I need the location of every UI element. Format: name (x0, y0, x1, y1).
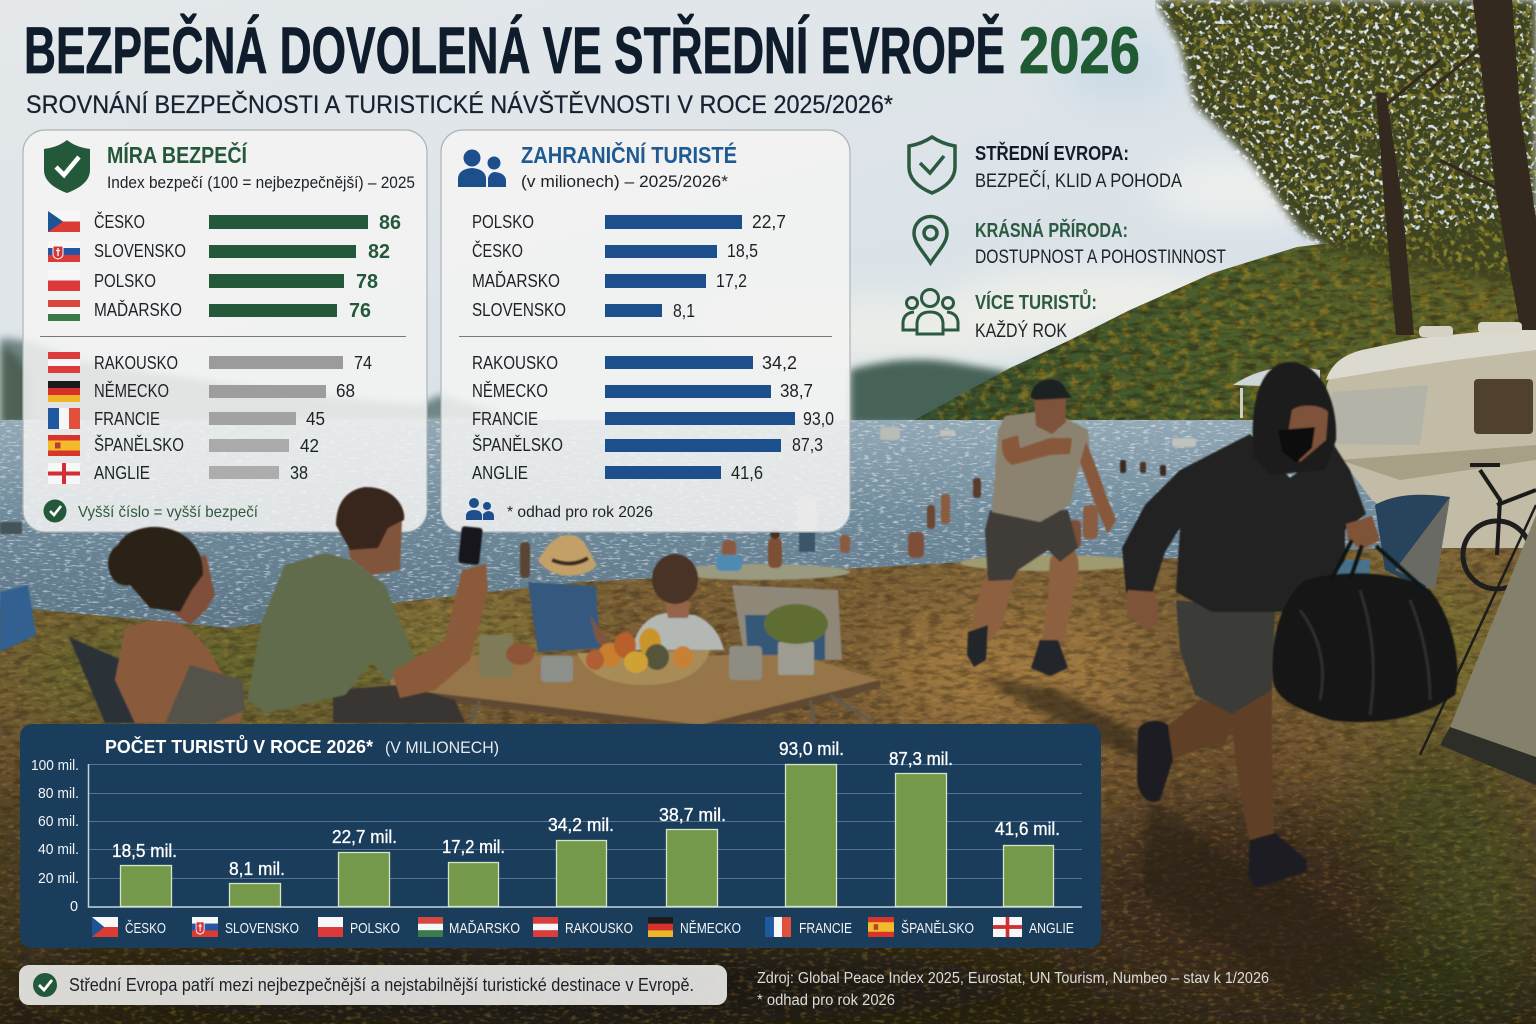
key message: safety: BEZPEČÍ, KLID A POHODA (975, 169, 1182, 192)
man with phone (247, 487, 488, 723)
row: Německo: NĚMECKO (472, 381, 548, 401)
row: Polsko (48, 270, 378, 293)
row: Slovensko: 8,1 (673, 301, 695, 321)
source note: * odhad pro rok 2026 (757, 992, 895, 1009)
bar value labels (112, 738, 1060, 879)
panel heading: ZAHRANIČNÍ TURISTÉ (521, 141, 737, 168)
panel heading: MÍRA BEZPEČÍ (107, 141, 248, 168)
thief: hands (1128, 516, 1380, 630)
photo: ground shadows (975, 675, 1400, 1000)
table with fruit (0, 535, 880, 732)
row: Maďarsko (48, 300, 371, 322)
row: Slovensko (48, 241, 390, 263)
photo: lake water (0, 420, 1536, 635)
runner: shirt (992, 412, 1090, 522)
row: Francie: FRANCIE (94, 409, 160, 429)
row: Slovensko: 82 (368, 241, 390, 263)
row: Německo: 38,7 (780, 381, 813, 401)
y axis labels (31, 757, 79, 915)
photo: tent (1420, 505, 1536, 785)
x axis country labels with flags: RAKOUSKO (565, 920, 633, 937)
row: Španělsko: 87,3 (792, 435, 823, 455)
key message: more tourists: KAŽDÝ ROK (975, 319, 1067, 342)
key message: safety (909, 137, 1182, 193)
photo: tree foliage (1155, 0, 1536, 290)
chart axes (88, 764, 1082, 907)
row: Slovensko (472, 300, 695, 321)
photo: ground and grass (0, 530, 1536, 1024)
row: Německo (472, 381, 813, 401)
callout: central Europe is safest (19, 965, 727, 1005)
panel subtitle: Index bezpečí (100 = nejbezpečnější) – 2025 (107, 173, 415, 192)
bar value labels: 17,2 mil. (442, 836, 505, 857)
row: Maďarsko: 17,2 (716, 271, 747, 291)
row: Rakousko: RAKOUSKO (472, 353, 558, 373)
runner: shorts (985, 510, 1078, 581)
row: Rakousko: 34,2 (762, 353, 797, 373)
note: estimate (466, 498, 653, 521)
photo: caravan (1233, 322, 1536, 548)
note: higher is safer (44, 500, 259, 522)
row: Francie: 45 (306, 409, 325, 429)
row: Maďarsko: MAĎARSKO (94, 300, 182, 320)
x axis country labels with flags: NĚMECKO (680, 920, 741, 937)
thief: face and mask (1286, 406, 1328, 462)
x axis country labels with flags: POLSKO (350, 920, 400, 937)
row: Rakousko (48, 352, 372, 373)
photo: tree trunks (1376, 0, 1536, 400)
row: Německo: 68 (336, 381, 355, 401)
panel: zahraniční turisté (441, 130, 850, 532)
icon: shield outline (909, 137, 955, 193)
woman: chair (69, 637, 165, 723)
bar value labels: 22,7 mil. (332, 826, 397, 847)
man: olive shirt (247, 553, 416, 713)
subtitle: SROVNÁNÍ BEZPEČNOSTI A TURISTICKÉ NÁVŠTĚVNOSTI V ROCE 2025/2026* (26, 90, 893, 119)
thief with hoodie and bag (1122, 362, 1458, 888)
photo: distant hills (0, 338, 1010, 425)
y axis labels: 40 mil. (38, 841, 79, 858)
chart heading: (V MILIONECH) (385, 738, 499, 757)
key message: more tourists (903, 288, 1097, 342)
man: shorts (333, 685, 465, 723)
row: Anglie: 38 (290, 463, 308, 483)
row: Francie: FRANCIE (472, 409, 538, 429)
photo: clouds (700, 30, 1330, 360)
thief: stolen bag (1272, 573, 1458, 722)
row: Anglie: ANGLIE (94, 463, 150, 483)
y axis labels: 20 mil. (38, 870, 79, 887)
row: Česko: ČESKO (94, 211, 145, 232)
woman: face (170, 555, 215, 625)
photo: beach crowd (0, 427, 1196, 580)
woman: body (115, 621, 245, 723)
panel: míra bezpečí (23, 130, 427, 532)
key message: nature (914, 217, 1226, 268)
row: Maďarsko (472, 271, 747, 291)
row: Německo: NĚMECKO (94, 381, 169, 401)
row: Česko: 86 (379, 212, 401, 234)
x axis country labels with flags: SLOVENSKO (225, 920, 299, 937)
row: Maďarsko: MAĎARSKO (472, 271, 560, 291)
source note: Zdroj: Global Peace Index 2025, Eurostat, UN Tourism, Numbeo – stav k 1/2026 (757, 970, 1269, 987)
row: Slovensko: SLOVENSKO (472, 300, 566, 320)
key message: more tourists: VÍCE TURISTŮ: (975, 288, 1097, 314)
chart heading (105, 735, 499, 757)
row: Česko: ČESKO (472, 240, 523, 261)
row: Francie: 93,0 (803, 409, 834, 429)
icon: shield (44, 140, 90, 193)
row: Česko (472, 240, 758, 261)
icon: group of people (903, 290, 958, 334)
x axis country labels with flags: ŠPANĚLSKO (901, 920, 974, 937)
icon: location pin (914, 217, 947, 263)
row: Francie (472, 409, 834, 429)
row: Německo (48, 381, 355, 402)
row: Francie (48, 408, 325, 429)
callout: central Europe is safest: Střední Evropa patří mezi nejbezpečnější a nejstabilnější turistické destinace v Evropě. (69, 975, 694, 995)
thief: legs (1156, 685, 1274, 842)
row: Polsko (472, 212, 786, 232)
row: Anglie (472, 463, 763, 483)
man: phone (458, 526, 483, 565)
runner chasing the thief (967, 379, 1116, 676)
x axis country labels with flags: MAĎARSKO (449, 920, 520, 937)
icon: tourists (458, 150, 506, 187)
potted plant (778, 642, 814, 675)
row: Polsko: 22,7 (752, 212, 786, 232)
x axis country labels with flags: FRANCIE (799, 920, 852, 937)
row: Polsko: POLSKO (94, 271, 156, 291)
woman: hair (108, 527, 203, 612)
thief: jacket (1122, 434, 1366, 612)
row: Anglie: ANGLIE (472, 463, 528, 483)
man: arm (392, 564, 488, 698)
source note (757, 970, 1269, 1009)
row: Španělsko (472, 434, 823, 455)
panel: bar chart of tourists in 2026 (20, 724, 1101, 948)
photo: sky (0, 0, 1536, 440)
x axis country labels with flags: ČESKO (125, 920, 166, 937)
x axis country labels with flags (92, 917, 1074, 937)
runner: arms (1002, 435, 1116, 534)
row: Španělsko (48, 434, 319, 456)
table: chairs (528, 582, 600, 652)
row: Polsko: 78 (356, 271, 378, 293)
cups (479, 635, 513, 677)
note: higher is safer: Vyšší číslo = vyšší bezpečí (78, 504, 259, 521)
y axis labels: 0 (70, 898, 78, 915)
thief: shoes (1137, 721, 1307, 888)
row: Rakousko: 74 (354, 353, 372, 373)
y axis labels: 80 mil. (38, 785, 79, 802)
straw hat (538, 535, 597, 576)
bar value labels: 8,1 mil. (229, 858, 285, 879)
runner: legs (970, 548, 1079, 642)
fruit bowl (577, 650, 710, 685)
bar value labels: 41,6 mil. (995, 818, 1060, 839)
row: Španělsko: ŠPANĚLSKO (94, 434, 184, 455)
runner: shoes (967, 625, 1068, 676)
row: Anglie: 41,6 (731, 463, 763, 483)
title: 2026 (1019, 13, 1140, 87)
bar value labels: 18,5 mil. (112, 840, 177, 861)
tabletop (388, 655, 880, 725)
chart heading: POČET TURISTŮ V ROCE 2026* (105, 735, 374, 757)
row: Slovensko: SLOVENSKO (94, 241, 186, 261)
key message: nature: KRÁSNÁ PŘÍRODA: (975, 218, 1128, 242)
bar value labels: 34,2 mil. (548, 814, 614, 835)
photo: forested hillside (914, 215, 1536, 420)
row: Rakousko: RAKOUSKO (94, 353, 178, 373)
woman sitting on chair (69, 527, 245, 723)
row: Španělsko: ŠPANĚLSKO (472, 434, 563, 455)
row: Rakousko (472, 353, 797, 373)
row: Maďarsko: 76 (349, 300, 371, 322)
row: Anglie (48, 463, 308, 484)
bar value labels: 93,0 mil. (779, 738, 844, 759)
x axis country labels with flags: ANGLIE (1029, 920, 1074, 937)
row: Španělsko: 42 (300, 436, 319, 456)
y axis labels: 100 mil. (31, 757, 79, 774)
man: head and hair (345, 520, 402, 575)
row: Česko: 18,5 (727, 241, 758, 261)
key message: safety: STŘEDNÍ EVROPA: (975, 141, 1129, 165)
bar value labels: 87,3 mil. (889, 748, 953, 769)
thief: shorts (1176, 600, 1275, 714)
row: Česko (48, 211, 401, 234)
y axis labels: 60 mil. (38, 813, 79, 830)
bars (120, 764, 1054, 906)
child with shirt (632, 613, 724, 650)
panel subtitle: (v milionech) – 2025/2026* (521, 172, 728, 191)
row: Polsko: POLSKO (472, 212, 534, 232)
key message: nature: DOSTUPNOST A POHOSTINNOST (975, 246, 1226, 268)
note: estimate: * odhad pro rok 2026 (507, 504, 653, 521)
bar value labels: 38,7 mil. (659, 804, 726, 825)
photo: camping chair and bicycles (1310, 465, 1536, 592)
thief: hood (1253, 362, 1336, 475)
title: BEZPEČNÁ DOVOLENÁ VE STŘEDNÍ EVROPĚ (24, 13, 1005, 87)
runner: face and cap (1034, 396, 1066, 434)
